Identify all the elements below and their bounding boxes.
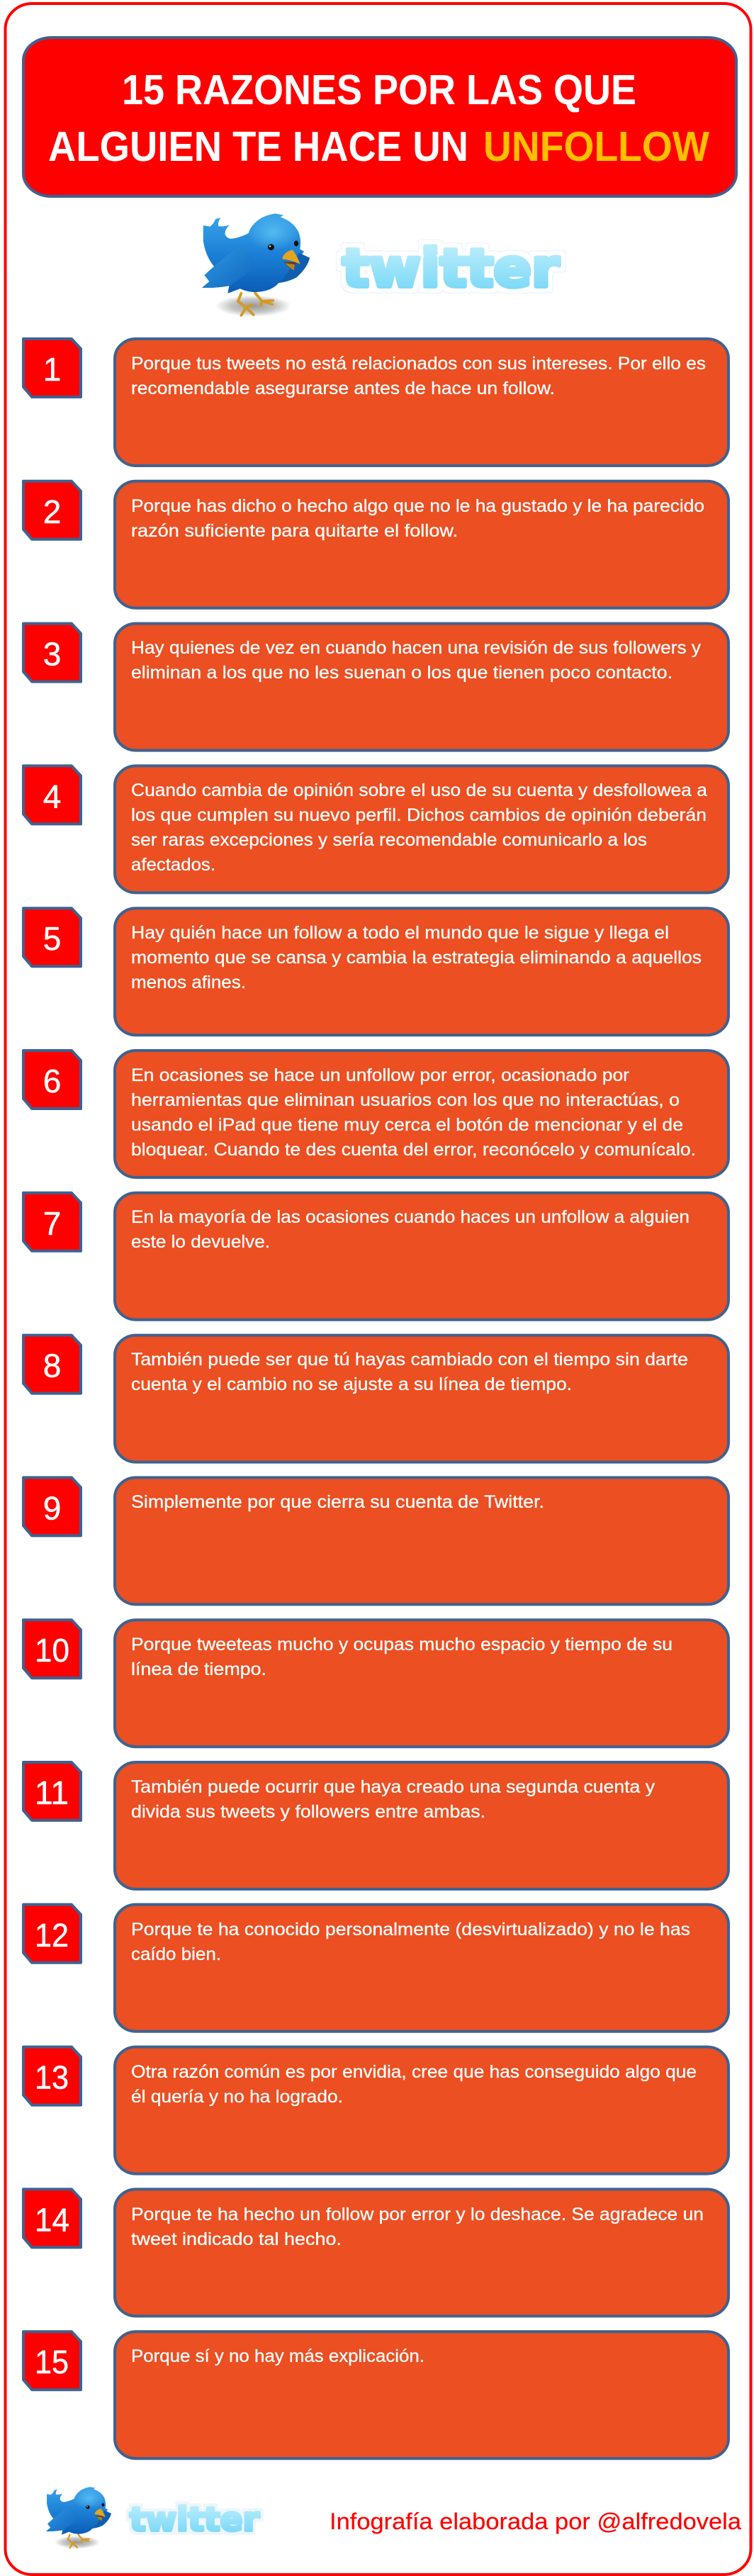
card 6	[115, 1051, 728, 1177]
number badge 6: 6	[43, 1063, 61, 1099]
text 1	[131, 354, 706, 398]
card 8	[115, 1335, 728, 1462]
number badge 13: 13	[35, 2059, 69, 2096]
number badge 1	[23, 339, 81, 397]
text 9: Simplemente por que cierra su cuenta de Twitter.	[131, 1492, 544, 1512]
number badge 2	[23, 481, 81, 539]
reason 15	[23, 2331, 728, 2458]
number badge 13	[23, 2047, 81, 2105]
text 4: afectados.	[131, 855, 215, 875]
number badge 11	[23, 1762, 81, 1820]
reason 11	[23, 1762, 728, 1889]
text 10: Porque tweeteas mucho y ocupas mucho espacio y tiempo de su	[131, 1635, 673, 1654]
icon: footer twitter bird	[46, 2487, 111, 2549]
card 3	[115, 624, 728, 751]
text 6: En ocasiones se hace un unfollow por error, ocasionado por	[131, 1065, 629, 1085]
text 14: tweet indicado tal hecho.	[131, 2229, 342, 2249]
reason 7	[23, 1193, 728, 1320]
number badge 9	[23, 1477, 81, 1535]
reason 13	[23, 2047, 728, 2174]
card 12	[115, 1905, 728, 2032]
text 3	[131, 638, 702, 683]
text 5: menos afines.	[131, 973, 246, 992]
number badge 7	[23, 1193, 81, 1251]
text 8: También puede ser que tú hayas cambiado con el tiempo sin darte	[131, 1350, 688, 1370]
number badge 15	[23, 2331, 81, 2390]
number badge 8: 8	[43, 1348, 61, 1384]
title text	[48, 67, 709, 170]
number badge 2: 2	[43, 493, 61, 530]
number badge 3	[23, 624, 81, 682]
number badge 14	[23, 2189, 81, 2247]
number badge 5: 5	[43, 920, 61, 957]
text 3: Hay quienes de vez en cuando hacen una revisión de sus followers y	[131, 638, 702, 658]
text 5: momento que se cansa y cambia la estrategia eliminando a aquellos	[131, 948, 702, 968]
reason 2	[23, 481, 728, 608]
card 5	[115, 908, 728, 1035]
text 11: divida sus tweets y followers entre ambas.	[131, 1802, 485, 1822]
number badge 10	[23, 1620, 81, 1678]
text 11	[131, 1777, 655, 1822]
number badge 15: 15	[35, 2343, 69, 2380]
text 15: Porque sí y no hay más explicación.	[131, 2346, 424, 2366]
text 2	[131, 496, 704, 541]
card 11	[115, 1762, 728, 1889]
reason 4	[23, 766, 728, 892]
text 10: línea de tiempo.	[131, 1659, 266, 1679]
reason 6	[23, 1051, 728, 1177]
number badge 4: 4	[43, 778, 61, 814]
text 7: En la mayoría de las ocasiones cuando haces un unfollow a alguien	[131, 1207, 690, 1227]
text 4	[131, 780, 707, 875]
number badge 10: 10	[35, 1632, 69, 1669]
reason 9	[23, 1477, 728, 1604]
title text: UNFOLLOW	[483, 123, 709, 170]
icon: twitter bird	[202, 213, 310, 317]
card 7	[115, 1193, 728, 1320]
card 15	[115, 2331, 728, 2458]
reason 12	[23, 1905, 728, 2032]
text 8	[131, 1350, 688, 1394]
reason 3	[23, 624, 728, 751]
text 4: los que cumplen su nuevo perfil. Dichos cambios de opinión deberán	[131, 805, 707, 825]
reason 1	[23, 339, 728, 466]
number badge 9: 9	[43, 1489, 61, 1526]
text 7	[131, 1207, 690, 1252]
number badge 3: 3	[43, 636, 61, 673]
text 10	[131, 1635, 673, 1679]
number badge 1: 1	[43, 351, 61, 388]
text 7: este lo devuelve.	[131, 1232, 270, 1252]
number badge 7: 7	[43, 1205, 61, 1242]
text 14: Porque te ha hecho un follow por error y lo deshace. Se agradece un	[131, 2205, 704, 2224]
reason 5	[23, 908, 728, 1035]
number badge 12	[23, 1905, 81, 1963]
card 10	[115, 1620, 728, 1747]
card 4	[115, 766, 728, 892]
text 5	[131, 923, 702, 992]
card 13	[115, 2047, 728, 2174]
number badge 14: 14	[35, 2201, 69, 2238]
text 4: ser raras excepciones y sería recomendable comunicarlo a los	[131, 830, 647, 850]
card 14	[115, 2189, 728, 2316]
twitter logo: twitter	[342, 238, 560, 299]
number badge 6	[23, 1051, 81, 1109]
number badge 11: 11	[35, 1774, 69, 1811]
footer twitter logo: twitter	[130, 2500, 259, 2538]
number badge 4	[23, 766, 81, 824]
text 14	[131, 2205, 704, 2249]
text 12	[131, 1920, 690, 1964]
text 6: usando el iPad que tiene muy cerca el botón de mencionar y el de	[131, 1115, 683, 1135]
text 6	[131, 1065, 696, 1160]
text 3: eliminan a los que no les suenan o los que tienen poco contacto.	[131, 663, 673, 683]
text 13: Otra razón común es por envidia, cree que has conseguido algo que	[131, 2062, 697, 2082]
text 6: bloquear. Cuando te des cuenta del error, reconócelo y comunícalo.	[131, 1140, 696, 1160]
text 5: Hay quién hace un follow a todo el mundo que le sigue y llega el	[131, 923, 669, 943]
text 4: Cuando cambia de opinión sobre el uso de su cuenta y desfollowea a	[131, 780, 707, 800]
number badge 5	[23, 908, 81, 966]
title banner	[23, 38, 736, 196]
text 2: Porque has dicho o hecho algo que no le ha gustado y le ha parecido	[131, 496, 704, 516]
card 9	[115, 1477, 728, 1604]
reason 14	[23, 2189, 728, 2316]
text 2: razón suficiente para quitarte el follow.	[131, 521, 458, 541]
text 12: caído bien.	[131, 1944, 221, 1964]
number badge 12: 12	[35, 1917, 69, 1954]
card 2	[115, 481, 728, 608]
text 8: cuenta y el cambio no se ajuste a su línea de tiempo.	[131, 1374, 572, 1394]
footer credit: Infografía elaborada por @alfredovela	[330, 2509, 741, 2534]
text 11: También puede ocurrir que haya creado una segunda cuenta y	[131, 1777, 655, 1797]
reason 8	[23, 1335, 728, 1462]
title text: 15 RAZONES POR LAS QUE	[122, 67, 636, 113]
text 12: Porque te ha conocido personalmente (desvirtualizado) y no le has	[131, 1920, 690, 1939]
banner background	[23, 38, 736, 196]
text 1: recomendable asegurarse antes de hace un follow.	[131, 379, 555, 398]
reason 10	[23, 1620, 728, 1747]
title text: ALGUIEN TE HACE UN	[48, 123, 468, 170]
text 6: herramientas que eliminan usuarios con los que no interactúas, o	[131, 1090, 680, 1110]
number badge 8	[23, 1335, 81, 1394]
card 1	[115, 339, 728, 466]
text 1: Porque tus tweets no está relacionados con sus intereses. Por ello es	[131, 354, 706, 374]
text 13	[131, 2062, 697, 2107]
text 13: él quería y no ha logrado.	[131, 2087, 343, 2107]
